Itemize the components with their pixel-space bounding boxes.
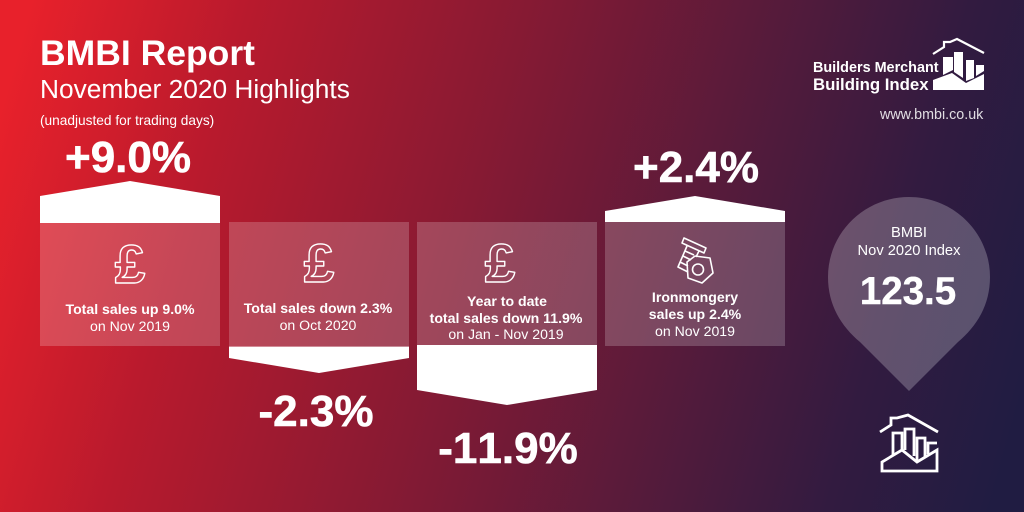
sublabel: on Jan - Nov 2019: [448, 326, 564, 342]
label: Total sales down 2.3%: [244, 300, 393, 316]
up arrow: [40, 181, 220, 223]
icon: pound: £: [485, 232, 516, 294]
panel: year to date: [417, 222, 597, 473]
label line 2: total sales down 11.9%: [430, 310, 583, 326]
label: Year to date: [467, 293, 547, 309]
sublabel: on Nov 2019: [90, 318, 170, 334]
value: +9.0%: [65, 133, 191, 182]
panel: total sales down 2.3%: [229, 222, 409, 436]
website: www.bmbi.co.uk: [879, 107, 984, 123]
card: [605, 222, 785, 346]
subheading: November 2020 Highlights: [40, 74, 350, 104]
icon: pound: £: [304, 232, 335, 294]
up arrow: [605, 196, 785, 222]
pin title: BMBI: [891, 225, 927, 241]
label: Ironmongery: [652, 289, 738, 305]
label line 2: sales up 2.4%: [649, 306, 742, 322]
heading: BMBI Report: [40, 33, 255, 73]
logo house icon: [933, 39, 984, 90]
down arrow: [229, 346, 409, 373]
icon: house with chart: [880, 415, 938, 471]
logo text second line: Building Index: [813, 75, 929, 94]
pin subtitle: Nov 2020 Index: [858, 243, 961, 259]
panel: total sales up 9.0%: [40, 133, 220, 346]
title block: [40, 33, 350, 128]
panel: ironmongery: [605, 143, 785, 346]
label: Total sales up 9.0%: [66, 301, 195, 317]
card: [40, 223, 220, 346]
index pin: [828, 197, 990, 391]
value: -11.9%: [438, 424, 578, 473]
sublabel: on Nov 2019: [655, 323, 735, 339]
down arrow: [417, 345, 597, 405]
logo: Builders Merchant Building Index: [813, 39, 984, 123]
value: +2.4%: [633, 143, 759, 192]
card: [417, 222, 597, 345]
sublabel: on Oct 2020: [280, 317, 357, 333]
logo text: Builders Merchant: [813, 60, 939, 76]
index value: 123.5: [860, 270, 956, 313]
icon: bolt and nut: [678, 238, 713, 283]
card: [229, 222, 409, 346]
value: -2.3%: [259, 387, 373, 436]
icon: pound: £: [115, 233, 146, 295]
pin shape: [828, 197, 990, 391]
note: (unadjusted for trading days): [40, 113, 214, 128]
